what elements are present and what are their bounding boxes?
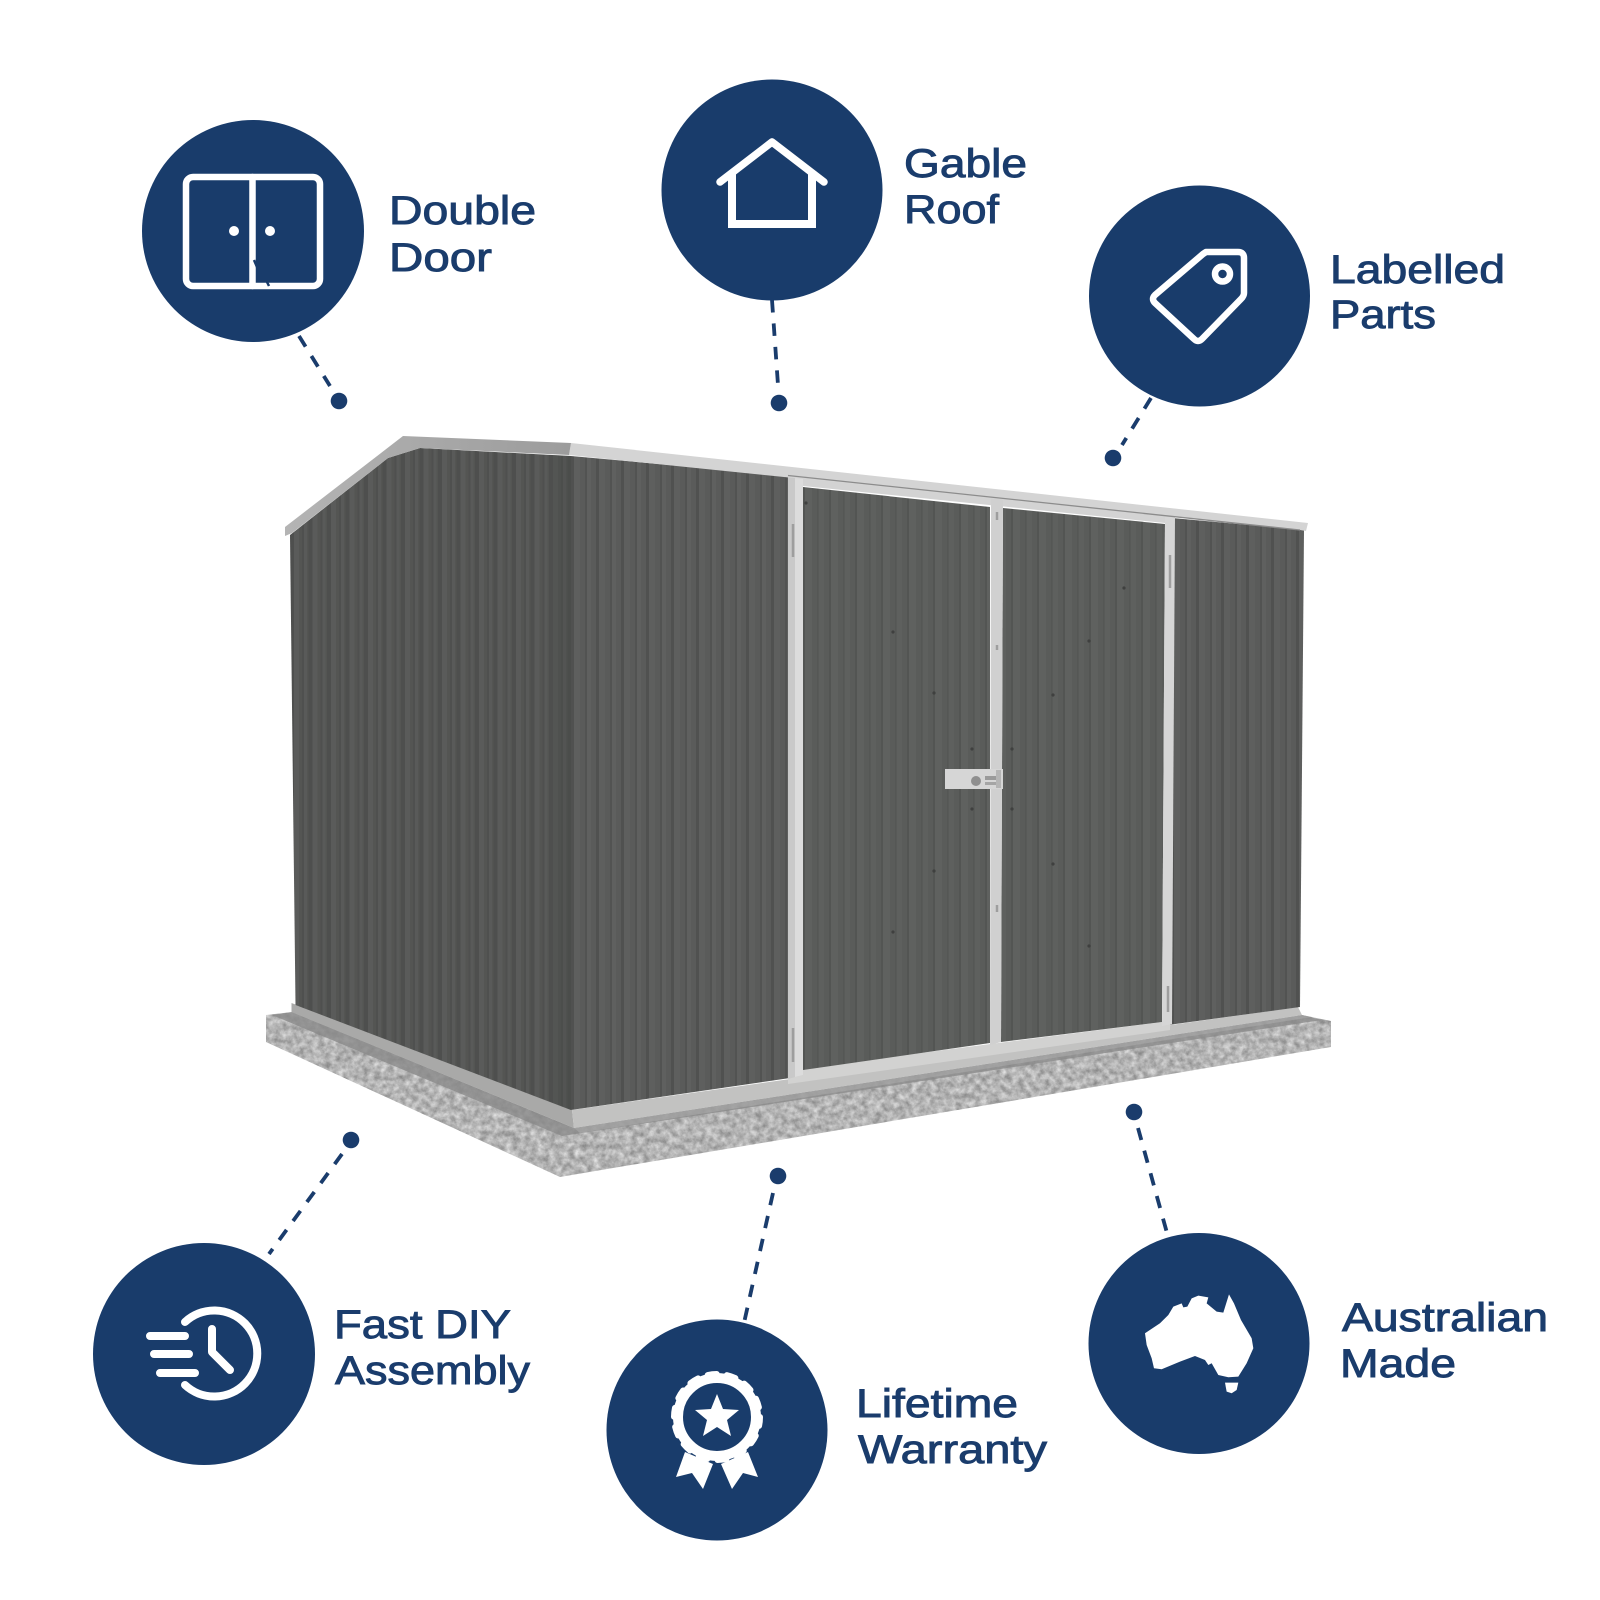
label: Parts [1330,293,1436,337]
door sill [788,1021,1170,1084]
hinges [793,512,1170,1062]
label: Door [389,236,492,280]
callout: Australian Made [1088,1233,1548,1454]
icon: house [720,142,824,224]
circle [662,80,882,300]
left door panel [803,487,990,1070]
label: Labelled [1330,248,1505,292]
right door panel [1001,508,1165,1042]
callout: Lifetime Warranty [606,1320,1047,1540]
label: Assembly [335,1349,530,1393]
icon: tag [1153,252,1244,341]
steel sill strip [292,1003,1302,1128]
connector: Gable Roof [771,300,787,411]
callout: Double Door [142,120,536,342]
door latch [945,769,1003,789]
circle [1088,1233,1310,1454]
icon: award rosette [674,1374,760,1489]
icon: Australia map [1145,1294,1253,1393]
circle [93,1243,315,1465]
front wall cladding [571,456,790,1110]
connector: Australian Made [1126,1104,1167,1233]
circle [142,120,364,342]
label: Lifetime [856,1382,1018,1426]
circle [1089,186,1310,406]
label: Fast DIY [334,1303,511,1347]
label [334,1303,530,1393]
roof fascia [569,443,1308,531]
label: Australian [1342,1296,1548,1340]
side wall cladding [290,448,571,1110]
label: Gable [904,142,1027,186]
label [1340,1296,1548,1386]
door screws [804,501,1126,948]
callout: Fast DIY Assembly [93,1243,530,1465]
label: Made [1340,1342,1456,1386]
label: Warranty [858,1428,1047,1472]
callout: Labelled Parts [1089,186,1505,406]
icon: fast clock [150,1310,257,1396]
circle [606,1320,828,1540]
concrete slab [266,1012,1331,1177]
label: Double [389,189,536,233]
connector: Fast DIY Assembly [269,1132,359,1254]
label [856,1382,1047,1472]
label [1330,248,1505,337]
connector: Lifetime Warranty [744,1168,786,1323]
connector: Double Door [299,336,347,409]
callout: Gable Roof [662,80,1027,300]
label: Roof [904,188,1000,232]
icon: double door [186,177,320,286]
label [904,142,1027,232]
door frame [788,476,1175,1079]
gable barge flashing [285,436,571,536]
connector: Labelled Parts [1105,398,1151,466]
label [389,189,536,280]
shed illustration [266,436,1331,1177]
